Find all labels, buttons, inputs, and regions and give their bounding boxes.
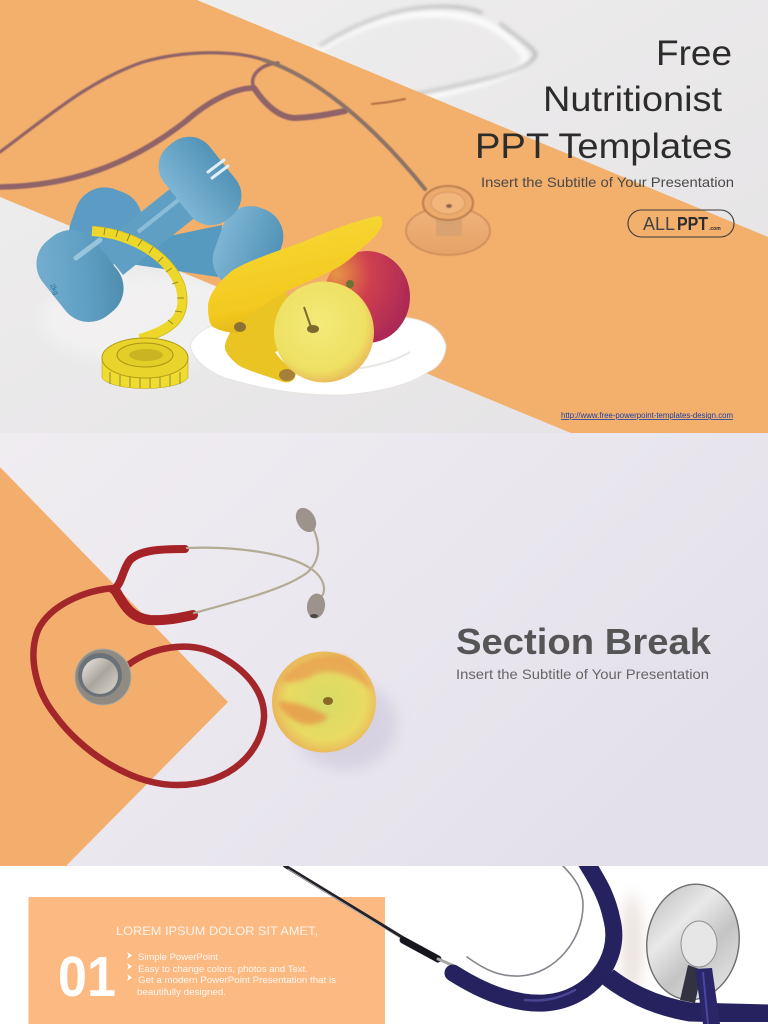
bullet list: Simple PowerPoint [138, 952, 218, 963]
icon: navy chest piece [639, 878, 747, 1024]
y branch [113, 549, 185, 590]
number 01: 01 [58, 945, 116, 1009]
thin metal tube [467, 866, 583, 976]
subtitle: Insert the Subtitle of Your Presentation [481, 174, 734, 190]
box heading: LOREM IPSUM DOLOR SIT AMET, [116, 924, 318, 938]
icon: measuring tape [92, 226, 188, 388]
logo: ALLPPT: .com [709, 226, 721, 232]
connector [403, 940, 438, 959]
icon: red stethoscope [33, 528, 324, 785]
chest piece reflection [406, 186, 490, 255]
bullet list: beautifully designed. [137, 987, 226, 998]
panel: orange text box [28, 897, 385, 1024]
heading: section break: Section Break [456, 621, 712, 662]
red apple [324, 251, 410, 343]
title: PPT Templates [475, 127, 732, 166]
logo: ALLPPT: PPT [677, 214, 708, 234]
icon: fruit [208, 216, 410, 383]
blurred stethoscope on grey [318, 7, 536, 100]
shadow stethoscope [0, 53, 425, 189]
panel: content slide background [0, 866, 768, 1024]
panel: section break slide background [0, 433, 768, 866]
upper banana [208, 216, 382, 333]
navy tube [453, 862, 614, 1003]
orange triangle [0, 467, 228, 866]
icon: navy stethoscope [285, 862, 768, 1014]
metal tubes [187, 548, 324, 596]
title: Free [656, 34, 732, 73]
link: website url: http://www.free-powerpoint-templates-design.com [561, 411, 733, 420]
icon: dumbbells [24, 126, 291, 334]
title [475, 34, 732, 166]
logo: ALLPPT: ALL [643, 214, 675, 234]
icon: plate [190, 317, 446, 395]
yellow apple [274, 282, 374, 382]
logo: ALLPPT [628, 210, 734, 237]
black metal rod [285, 866, 403, 938]
title: Nutritionist [543, 80, 722, 119]
bullet list: Get a modern PowerPoint Presentation that is [138, 975, 336, 986]
soft shadow [622, 895, 642, 995]
back dumbbell [61, 179, 291, 298]
bullet list: Easy to change colors, photos and Text. [138, 964, 308, 975]
bullet list [127, 952, 336, 998]
main tube [33, 588, 264, 785]
icon: chest piece [75, 649, 131, 705]
icon: apple [272, 652, 397, 770]
front dumbbell [24, 126, 252, 334]
panel: title slide background [0, 0, 768, 433]
orange diagonal band [0, 0, 768, 433]
icon: ear tips [292, 504, 327, 620]
front dumbbell: 2kg [48, 283, 59, 296]
lower banana [225, 285, 296, 383]
subtitle: section break: Insert the Subtitle of Your Presentation [456, 666, 709, 682]
